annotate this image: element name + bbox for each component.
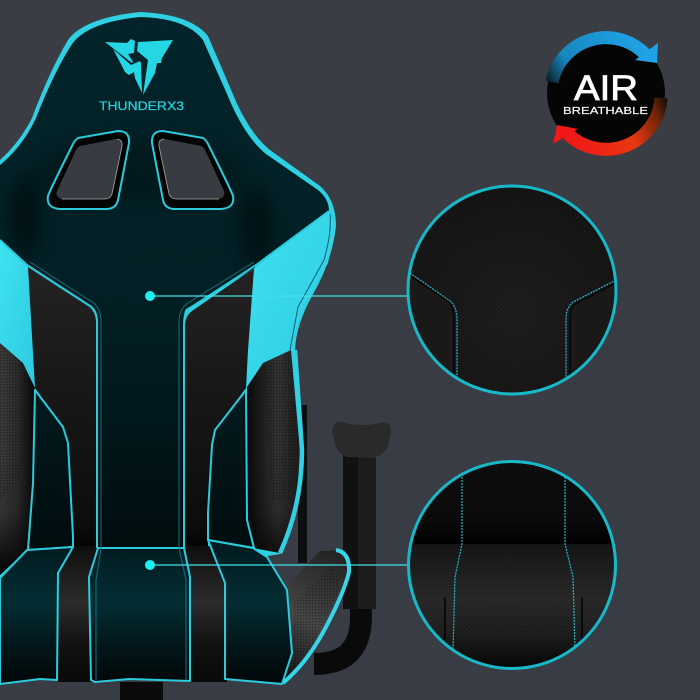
left back side panel — [28, 390, 73, 550]
right headrest slot — [152, 131, 233, 209]
logo: thunder emblem — [105, 39, 173, 95]
left headrest slot — [48, 131, 129, 209]
callout: lower dot and leader line — [145, 560, 408, 570]
rear post — [298, 405, 307, 563]
seat right panel — [208, 540, 292, 684]
chair illustration — [0, 0, 391, 700]
zoom circle: seat junction leather — [400, 460, 630, 670]
badge subtitle: BREATHABLE — [563, 106, 648, 117]
right black panel — [185, 268, 254, 550]
zoom circle: backrest perforated leather — [406, 184, 618, 396]
right wing seam — [290, 214, 330, 350]
thigh cyan piping — [283, 550, 349, 683]
badge title: AIR — [574, 69, 638, 108]
thigh bolster carbon — [283, 550, 349, 683]
right carbon side — [247, 350, 300, 553]
right cyan wing — [247, 212, 335, 387]
carbon texture — [0, 343, 298, 500]
upper teal panel — [0, 17, 329, 548]
badge: air breathable — [547, 34, 665, 152]
seat right band — [185, 546, 227, 682]
left black panel — [28, 267, 96, 550]
seat back shell — [0, 12, 336, 600]
seat left panel — [0, 547, 73, 684]
red arrow arc — [553, 98, 661, 149]
chair base — [120, 682, 163, 700]
seat center panel — [89, 548, 190, 682]
right back side panel — [208, 390, 254, 548]
thigh bolster texture — [292, 565, 340, 670]
upper panel shadows — [4, 18, 277, 271]
callout: upper dot and leader line — [145, 291, 408, 301]
seat left band — [58, 546, 98, 682]
left carbon side — [0, 343, 35, 575]
logo: wordmark: THUNDERX3 — [99, 101, 184, 113]
carbon lower fade — [0, 450, 301, 575]
right outer piping — [280, 350, 302, 553]
armrest — [314, 422, 391, 664]
blue arrow arc — [552, 38, 658, 82]
center piping lines — [0, 211, 329, 680]
left cyan wing — [0, 240, 35, 388]
badge disc — [547, 34, 665, 152]
